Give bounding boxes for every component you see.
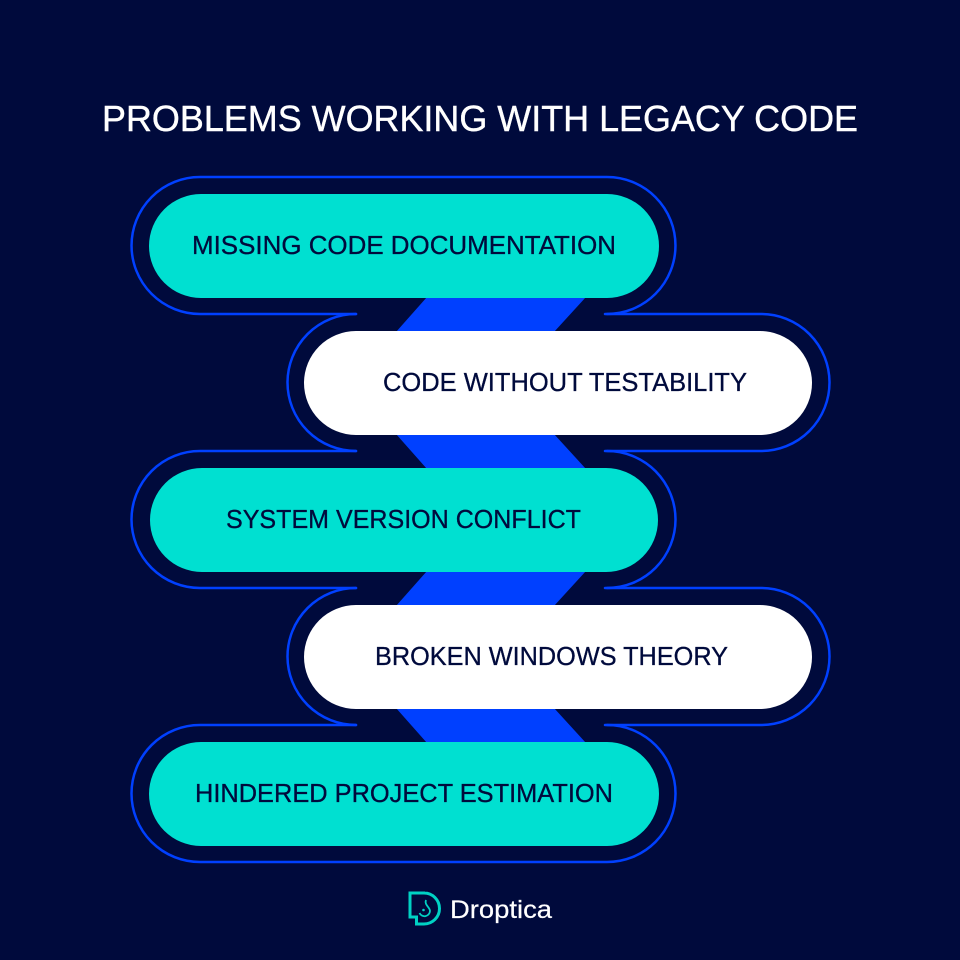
pill: missing code documentation — [149, 194, 659, 298]
pill: code without testability — [304, 331, 812, 435]
title: PROBLEMS WORKING WITH LEGACY CODE — [102, 98, 858, 139]
pill: hindered project estimation — [149, 742, 659, 846]
pill: system version conflict: SYSTEM VERSION CONFLICT — [226, 504, 581, 534]
pill: hindered project estimation: HINDERED PROJECT ESTIMATION — [195, 778, 613, 808]
outline contours — [132, 177, 829, 862]
pill: code without testability: CODE WITHOUT TESTABILITY — [383, 367, 747, 397]
pill: missing code documentation: MISSING CODE DOCUMENTATION — [192, 230, 616, 260]
connector bands — [396, 297, 586, 743]
pill: broken windows theory — [304, 605, 812, 709]
logo: droptica — [410, 893, 552, 924]
pill: system version conflict — [150, 468, 658, 572]
pill: broken windows theory: BROKEN WINDOWS THEORY — [375, 641, 728, 671]
logo: droptica: Droptica — [450, 896, 552, 924]
